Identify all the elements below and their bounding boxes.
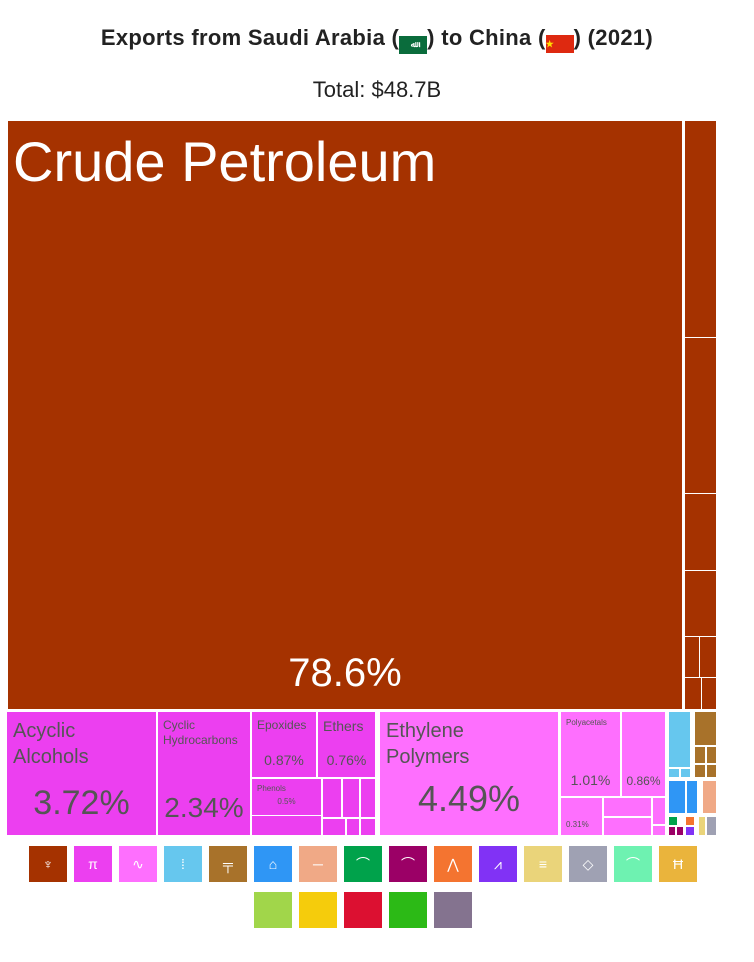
legend: ⌂ <box>269 856 277 872</box>
legend: ⌒ <box>401 856 415 872</box>
tile: acyclic alcohols: 3.72% <box>33 784 130 822</box>
tile: cyclic hydrocarbons: Cyclic <box>163 718 195 732</box>
tile: phenols: Phenols <box>257 784 286 793</box>
tile: acyclic alcohols: Alcohols <box>13 746 89 768</box>
tile: ethers: Ethers <box>323 718 363 734</box>
tile: epoxides <box>251 711 317 778</box>
legend: ⌒ <box>626 856 640 872</box>
tile: cyclic hydrocarbons: 2.34% <box>164 792 244 823</box>
tile: crude petroleum: Crude Petroleum <box>13 130 436 193</box>
tile: ethylene polymers: 4.49% <box>418 778 520 819</box>
title: ★ <box>546 39 554 49</box>
subtitle: total: Total: $48.7B <box>313 77 441 102</box>
title: Exports from Saudi Arabia ( ) to China ( ) (2021) <box>101 25 653 50</box>
legend: Ħ <box>673 856 683 872</box>
tile: crude petroleum: 78.6% <box>288 651 402 695</box>
tile: ethers: 0.76% <box>327 752 366 768</box>
legend: ─ <box>313 856 323 872</box>
legend: π <box>88 856 98 872</box>
tile: ethers <box>317 711 376 778</box>
legend: ∿ <box>132 856 144 872</box>
legend: ⩘ <box>494 856 502 872</box>
tile: cyclic hydrocarbons <box>157 711 251 836</box>
tile: epoxides: Epoxides <box>257 718 306 732</box>
treemap <box>7 121 716 835</box>
tile: acyclic alcohols <box>6 711 157 836</box>
tile: ethylene polymers: Ethylene <box>386 720 464 742</box>
tile: phenols: 0.5% <box>277 797 296 806</box>
treemap: 0.86% <box>626 774 661 788</box>
tile: phenols <box>251 778 322 816</box>
tile: acyclic alcohols: Acyclic <box>13 720 75 742</box>
tile: ethylene polymers: Polymers <box>386 746 469 768</box>
title: ﷲ <box>411 40 416 49</box>
tile: polyacetals: Polyacetals <box>566 718 607 727</box>
treemap: 0.31% <box>566 820 589 829</box>
tile: crude petroleum <box>7 120 683 710</box>
tile: ethylene polymers <box>379 711 559 836</box>
tile: polyacetals: 1.01% <box>571 772 610 788</box>
legend: ≡ <box>539 856 547 872</box>
tile: epoxides: 0.87% <box>264 752 304 768</box>
legend: ⁞ <box>181 856 185 872</box>
tiles: other small categories <box>668 711 691 768</box>
tile: polyacetals <box>560 711 621 797</box>
legend: ♆ <box>43 856 53 872</box>
legend: ╤ <box>223 856 233 872</box>
legend: ⌒ <box>356 856 370 872</box>
tiles: other petroleum <box>684 120 717 338</box>
legend: ⋀ <box>447 856 459 872</box>
tile: cyclic hydrocarbons: Hydrocarbons <box>163 733 238 747</box>
legend <box>29 846 697 928</box>
legend: ◇ <box>583 856 593 872</box>
